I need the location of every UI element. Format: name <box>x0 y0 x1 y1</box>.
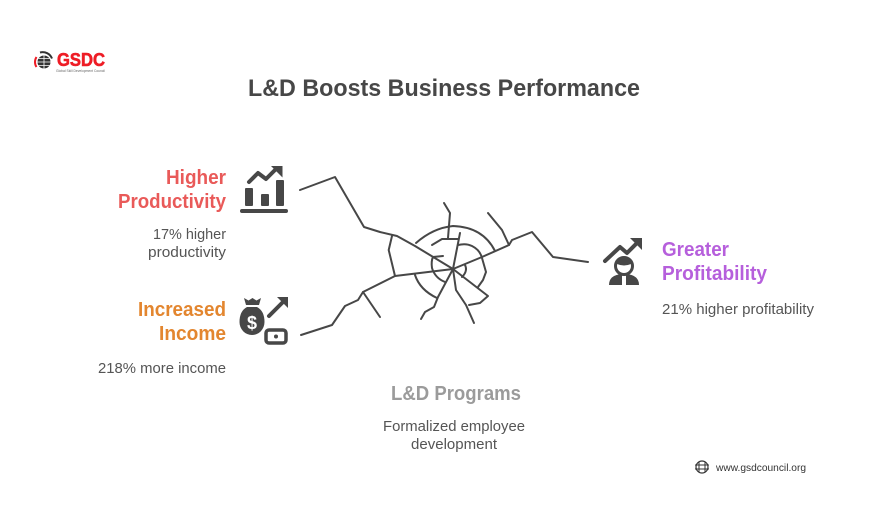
heading: Higher Productivity <box>118 167 227 213</box>
heading: Greater Profitability: Greater <box>662 239 729 261</box>
text: 17% higher productivity <box>148 227 227 261</box>
logo: GSDC: Global Skill Development Council <box>56 68 105 73</box>
heading: Increased Income <box>138 299 226 345</box>
icon: person with rising arrow <box>605 238 642 285</box>
icon: money bag and arrow <box>240 297 288 343</box>
text: Formalized employee development: Formalized employee <box>383 419 525 435</box>
heading: Higher Productivity: Higher <box>166 167 226 189</box>
heading: Greater Profitability: Profitability <box>662 263 768 285</box>
text: 21% higher profitability: 21% higher profitability <box>662 302 815 318</box>
text: 17% higher productivity: 17% higher <box>153 227 226 243</box>
diagram: cracked radial network <box>300 177 588 335</box>
text: Formalized employee development: development <box>411 437 497 453</box>
icon: bar chart rising <box>240 166 288 213</box>
heading: Increased Income: Increased <box>138 299 226 321</box>
icon: money bag and arrow: $ <box>247 313 257 333</box>
heading: Greater Profitability <box>662 239 768 285</box>
logo: GSDC: GSDC <box>57 50 105 70</box>
text: 218% more income: 218% more income <box>98 361 226 377</box>
text: 17% higher productivity: productivity <box>148 245 227 261</box>
heading: Increased Income: Income <box>159 323 226 345</box>
footer: website: www.gsdcouncil.org <box>715 463 806 474</box>
heading: L&D Programs: L&D Programs <box>391 383 521 405</box>
logo: GSDC <box>35 50 105 73</box>
text: Formalized employee development <box>383 419 525 453</box>
heading: Higher Productivity: Productivity <box>118 191 227 213</box>
title: L&D Boosts Business Performance <box>248 75 640 102</box>
footer: website <box>695 461 806 474</box>
